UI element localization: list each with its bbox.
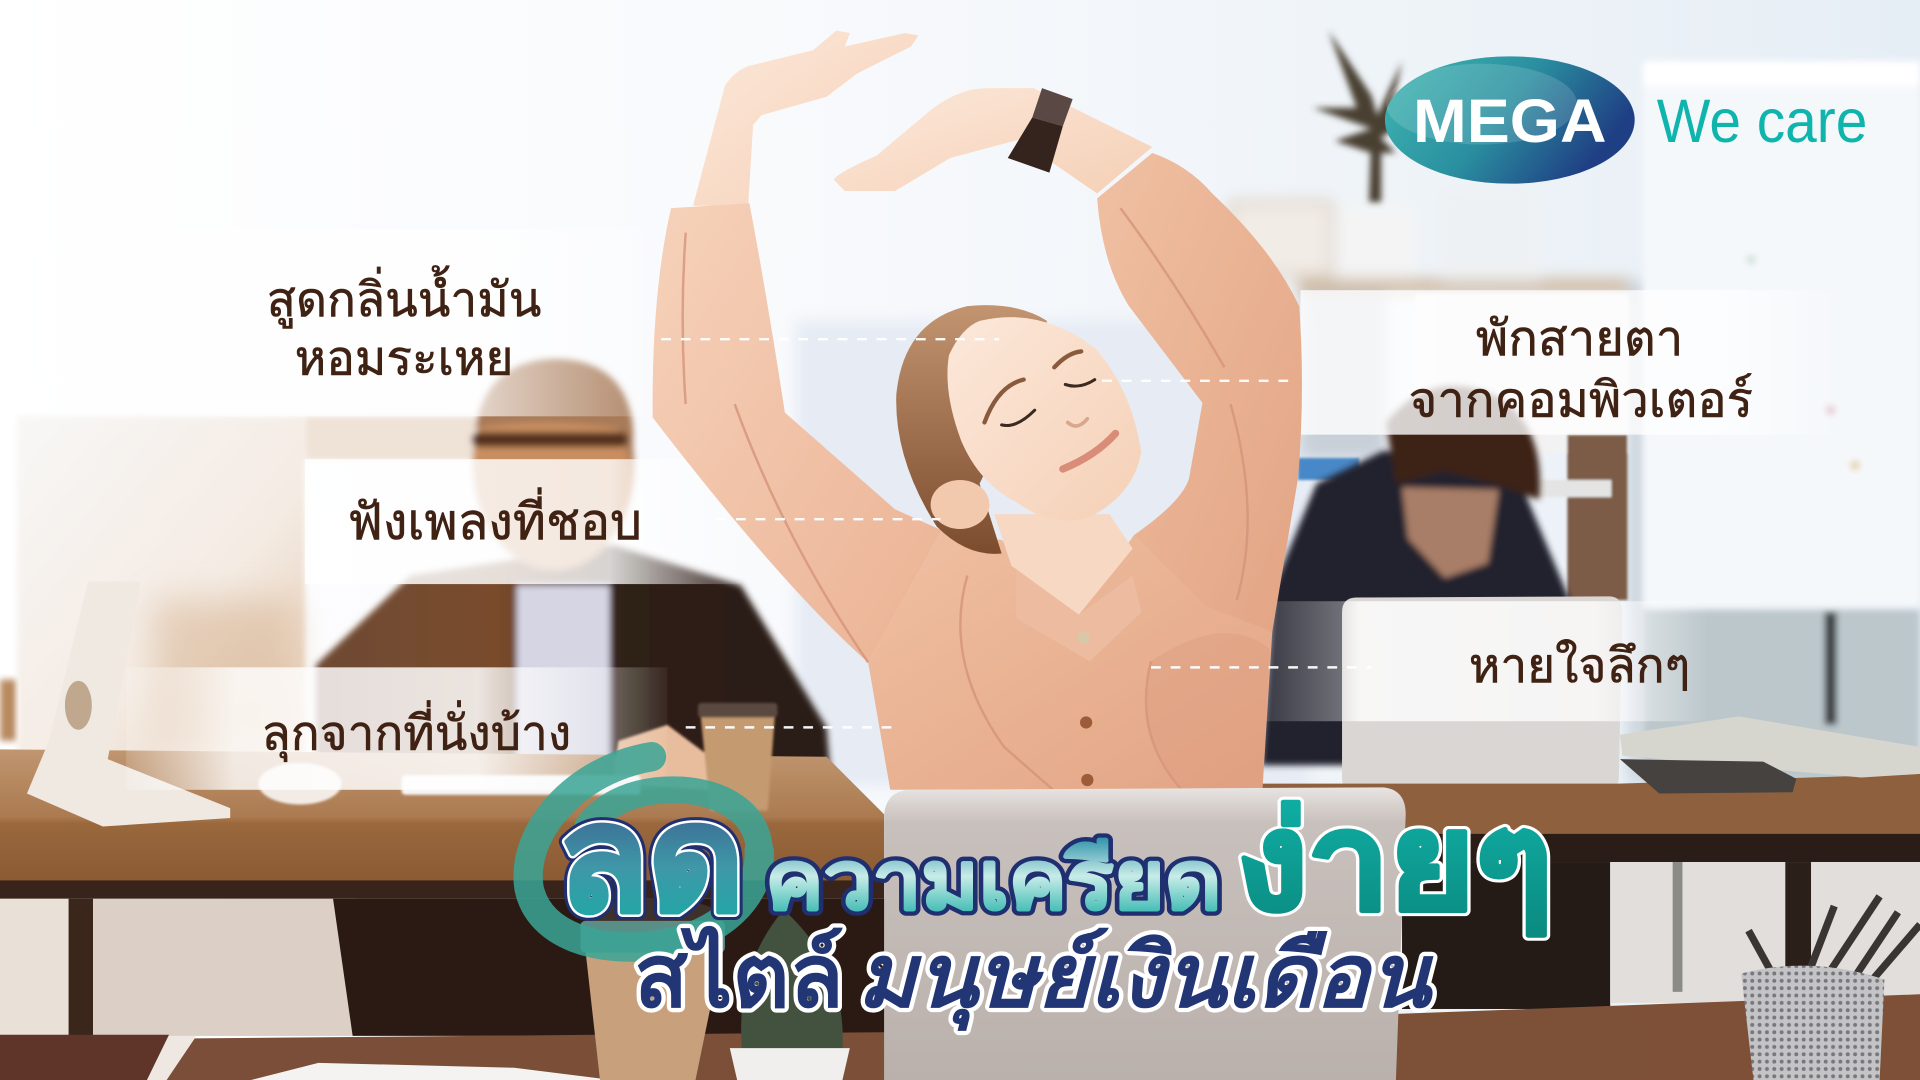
callout: rest eyes: พักสายตา <box>1476 312 1683 366</box>
seated man left <box>305 359 830 771</box>
title word: lot: ลด <box>558 778 744 942</box>
ear <box>931 480 989 529</box>
watch <box>1008 88 1073 173</box>
callout: music: ฟังเพลงที่ชอบ <box>347 487 642 550</box>
title line two <box>634 926 1434 1031</box>
shelf unit <box>1298 294 1629 600</box>
title word: stress: ความเครียด <box>765 835 1221 926</box>
face <box>947 317 1141 521</box>
left monitor <box>0 416 305 759</box>
callout: rest eyes: จากคอมพิวเตอร์ <box>1409 372 1753 427</box>
sleeve shadow panel <box>1146 633 1270 790</box>
body <box>868 530 1272 790</box>
cactus <box>730 910 850 1080</box>
title word: easy: ง่ายๆ <box>1237 787 1553 937</box>
foreground table <box>167 994 1920 1080</box>
title word: lot: ลด <box>558 778 744 942</box>
logo highlight <box>1386 64 1577 144</box>
collar and buttons <box>1016 569 1141 786</box>
logo oval <box>1385 56 1635 184</box>
seated man right <box>1261 386 1570 765</box>
hair <box>896 305 1047 554</box>
title word: easy: ง่ายๆ <box>1237 787 1553 937</box>
facial features <box>984 351 1116 469</box>
desk items <box>258 703 778 811</box>
coffee cup <box>580 899 725 1080</box>
whiteboard <box>1643 61 1920 781</box>
callout: smell essential oil: หอมระเหย <box>295 333 513 386</box>
We care: We care <box>1657 87 1867 155</box>
MEGA wordmark: MEGA <box>1413 87 1607 155</box>
pencil cup <box>1741 896 1920 1080</box>
monitor stand <box>27 582 230 827</box>
title word: stress: ความเครียด <box>765 835 1221 926</box>
callout: stand up: ลุกจากที่นั่งบ้าง <box>261 700 571 762</box>
blouse folds <box>683 208 1248 790</box>
left arm and hand <box>693 31 918 206</box>
title brush ring <box>528 757 759 947</box>
callout: breathe: หายใจลึกๆ <box>1469 639 1690 693</box>
woman stretching <box>653 31 1302 790</box>
right sleeve <box>1097 153 1302 632</box>
title <box>558 778 1553 1031</box>
blurred back wall <box>796 190 1646 786</box>
plant <box>1313 31 1418 202</box>
title line two: มนุษย์เงินเดือน <box>857 926 1434 1031</box>
logo <box>1385 56 1867 184</box>
title line two: สไตล์ <box>634 926 844 1026</box>
rear laptop <box>1342 596 1622 790</box>
label backing bands <box>122 229 1839 790</box>
left sleeve <box>653 203 942 662</box>
right desk <box>1261 716 1920 1009</box>
dashed leader lines <box>661 339 1371 727</box>
callout: smell essential oil: สูดกลิ่นน้ำมัน <box>267 265 541 329</box>
right arm and hand <box>834 88 1152 193</box>
left desk <box>0 749 888 1036</box>
foreground laptop <box>884 787 1406 1080</box>
stand cutout <box>65 681 92 730</box>
neck <box>994 514 1133 615</box>
title word: lot: ลด <box>558 778 744 942</box>
